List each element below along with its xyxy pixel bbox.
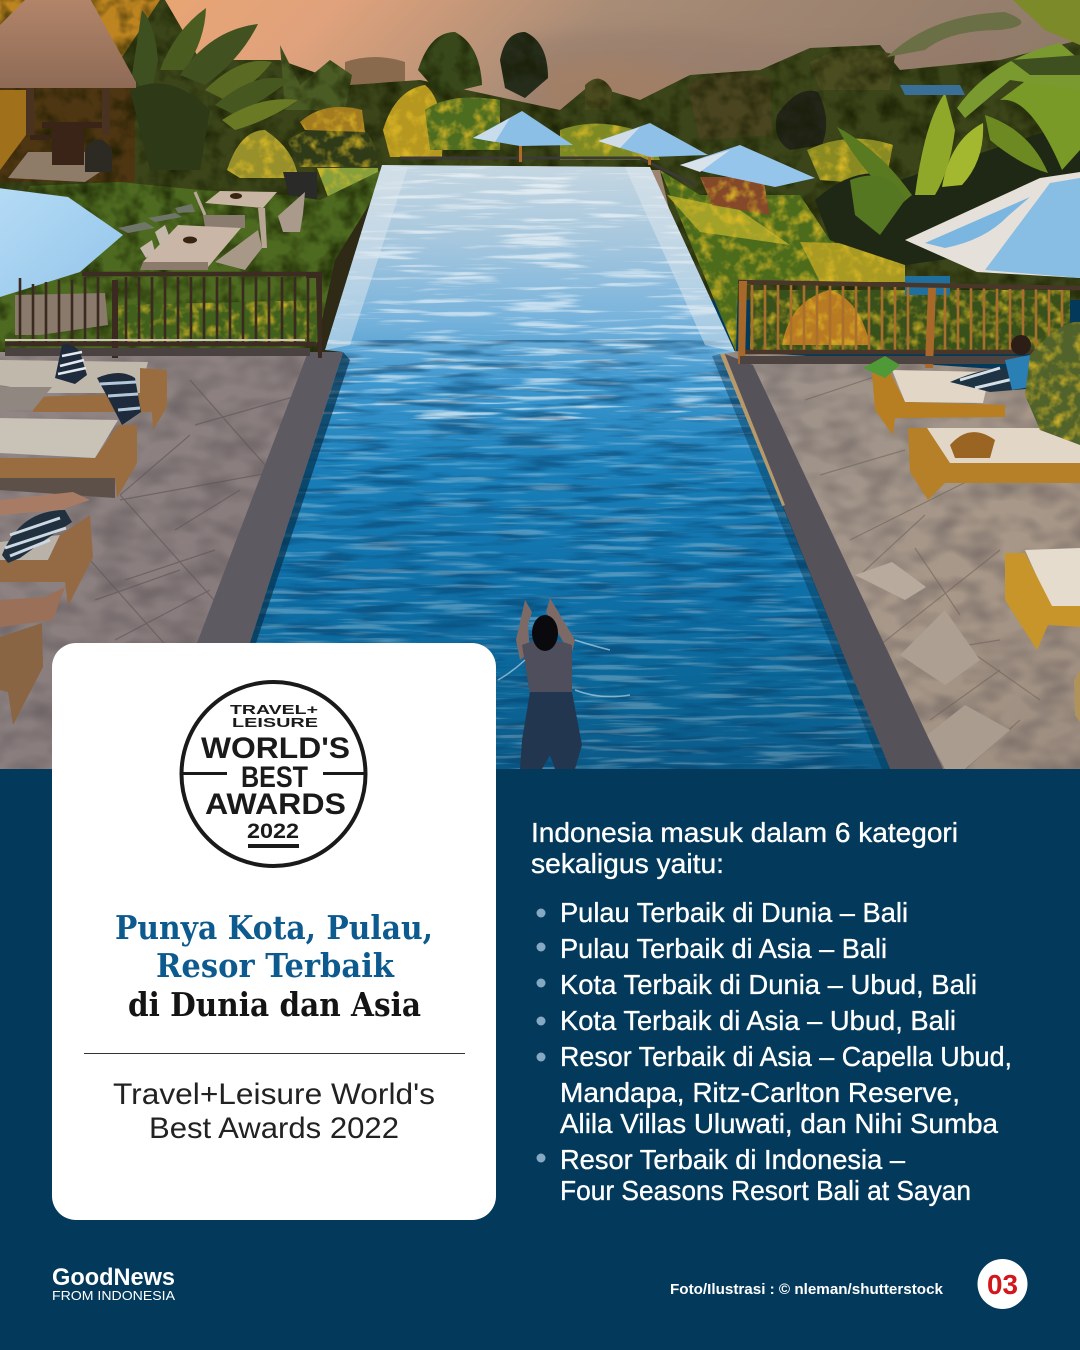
item: best resort indonesia: Four Seasons Resort Bali at Sayan	[560, 1175, 971, 1206]
item: best resort asia: Resor Terbaik di Asia – Capella Ubud,	[560, 1041, 1012, 1072]
logo: Travel + Leisure World's Best Awards 2022 badge: 2022	[247, 820, 299, 843]
railing left	[5, 272, 322, 358]
photo: infinity pool at sunset	[0, 0, 1080, 770]
umbrella: far middle	[598, 123, 708, 165]
list: award categories	[536, 897, 1012, 1206]
item: best island asia: Pulau Terbaik di Asia – Bali	[560, 933, 887, 964]
logo: Travel + Leisure World's Best Awards 2022 badge	[181, 682, 366, 866]
panel: white title card	[52, 643, 496, 1220]
left deck behind rail	[15, 293, 108, 335]
text: intro paragraph: sekaligus yaitu:	[531, 848, 724, 879]
terraces	[0, 350, 1080, 769]
text: intro paragraph	[531, 817, 958, 879]
logo: GoodNews from Indonesia: GoodNews	[52, 1264, 175, 1291]
umbrella: near middle	[680, 145, 815, 187]
railing right	[738, 281, 1080, 368]
gazebo interior	[0, 88, 135, 182]
plants behind right rail	[750, 290, 1070, 350]
orange glow left	[0, 90, 26, 170]
logo: GoodNews from Indonesia	[52, 1264, 176, 1303]
dark soil at pool edge	[315, 202, 370, 352]
logo: GoodNews from Indonesia: FROM INDONESIA	[52, 1289, 176, 1303]
right loungers and bather	[863, 335, 1080, 722]
logo: Travel + Leisure World's Best Awards 2022 badge: LEISURE	[232, 715, 318, 730]
item: best city asia: Kota Terbaik di Asia – Ubud, Bali	[560, 1005, 956, 1036]
item: best resort indonesia: Resor Terbaik di Indonesia –	[560, 1144, 905, 1175]
text: award name: Travel+Leisure World's	[113, 1078, 435, 1111]
text: photo credit: Foto/Ilustrasi : © nleman/shutterstock	[670, 1281, 944, 1298]
right planting	[660, 170, 905, 352]
stone pool curbs	[197, 352, 943, 769]
item: best city world: Kota Terbaik di Dunia – Ubud, Bali	[560, 969, 977, 1000]
palm leaves left	[130, 8, 298, 170]
gazebo roof and furniture	[0, 0, 317, 200]
plants behind left rail	[118, 300, 320, 342]
sky and hazy mountains	[165, 0, 1073, 208]
pool water	[240, 160, 900, 770]
umbrella: far left	[473, 111, 573, 162]
logo: Travel + Leisure World's Best Awards 2022 badge: WORLD'S	[201, 732, 350, 765]
page number badge	[978, 1259, 1028, 1309]
heading: card title: Resor Terbaik	[156, 946, 395, 985]
heading: card title: di Dunia dan Asia	[128, 985, 421, 1024]
right plants foreground	[1025, 322, 1080, 445]
swimmer	[498, 598, 630, 769]
umbrella: big right	[905, 172, 1080, 278]
heading: card title	[115, 908, 433, 1024]
heading: card title: Punya Kota, Pulau,	[115, 908, 433, 947]
foliage base: dark undergrowth across the hillside	[0, 0, 1080, 300]
blue cushion behind rail	[905, 276, 950, 295]
item: best resort asia	[536, 1041, 1012, 1139]
umbrella: big left	[0, 188, 123, 297]
page number badge: 03	[987, 1269, 1018, 1300]
stepping stones	[118, 204, 195, 233]
left lawn	[0, 165, 392, 352]
yellow shrubs left	[227, 85, 893, 202]
logo: Travel + Leisure World's Best Awards 2022 badge: AWARDS	[205, 788, 346, 821]
left loungers and bathers	[0, 344, 167, 725]
banana plants right	[815, 0, 1080, 265]
text: award name	[113, 1078, 435, 1145]
text: award name: Best Awards 2022	[149, 1112, 399, 1145]
top left orange canopy	[0, 0, 160, 57]
far pool railing	[400, 158, 695, 185]
item: best island world: Pulau Terbaik di Dunia – Bali	[560, 897, 908, 928]
logo: Travel + Leisure World's Best Awards 2022 badge: BEST	[241, 761, 308, 794]
background trees	[280, 32, 895, 150]
logo: Travel + Leisure World's Best Awards 2022 badge: TRAVEL+	[230, 702, 319, 717]
item: best resort asia: Mandapa, Ritz-Carlton Reserve,	[560, 1077, 960, 1108]
item: best resort asia: Alila Villas Uluwati, dan Nihi Sumba	[560, 1108, 998, 1139]
garden tables	[140, 191, 305, 270]
item: best resort indonesia	[536, 1144, 971, 1206]
text: intro paragraph: Indonesia masuk dalam 6 kategori	[531, 817, 958, 848]
